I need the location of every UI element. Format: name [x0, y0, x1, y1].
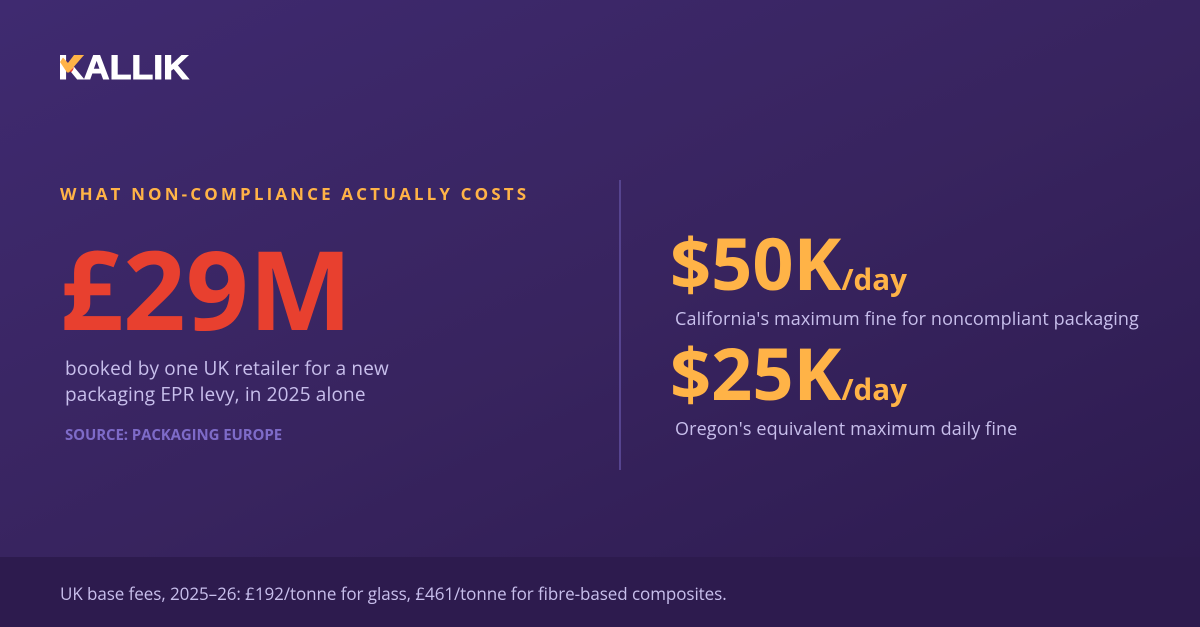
- stat description: booked by one UK retailer for a new: [65, 355, 389, 381]
- big stat: £29M: £29M: [60, 213, 352, 363]
- Oregon label: Oregon's equivalent maximum daily fine: [675, 417, 1017, 441]
- California label: California's maximum fine for noncompliant packaging: [675, 307, 1139, 331]
- source: SOURCE: PACKAGING EUROPE: [65, 425, 282, 445]
- stat description: [65, 355, 389, 407]
- footer note: UK base fees, 2025–26: £192/tonne for glass, £461/tonne for fibre-based composites.: [60, 582, 727, 605]
- vertical divider: [619, 180, 621, 470]
- footer band: [0, 557, 1200, 627]
- stat description: packaging EPR levy, in 2025 alone: [65, 381, 366, 407]
- heading: WHAT NON-COMPLIANCE ACTUALLY COSTS: [60, 182, 529, 205]
- stat: Oregon fine: $25K/day: [670, 324, 907, 422]
- stat: California fine: $50K/day: [670, 214, 907, 312]
